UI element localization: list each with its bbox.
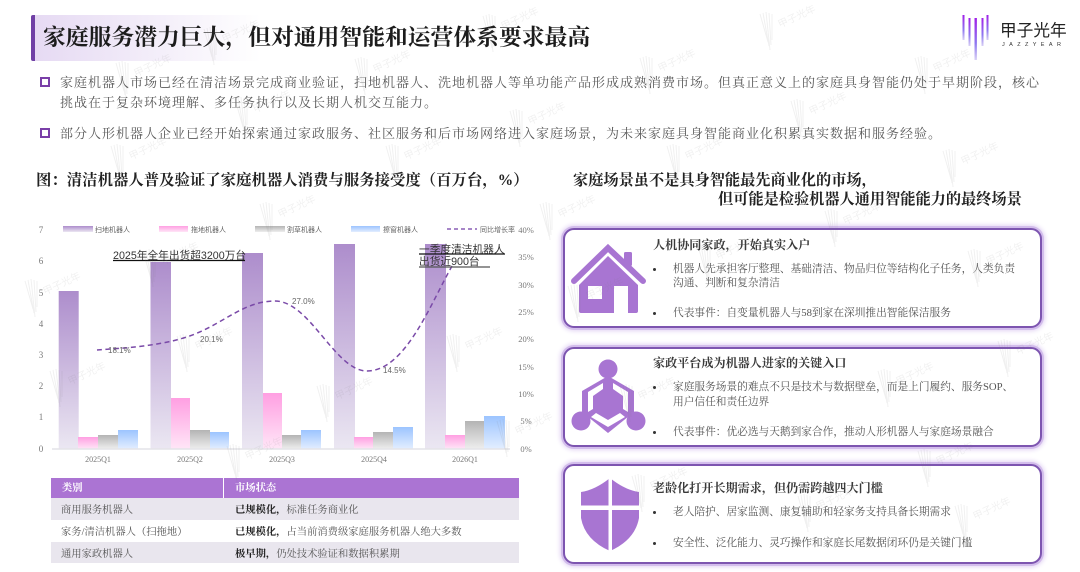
text: 甲子光年 bbox=[463, 324, 505, 353]
bars bbox=[59, 244, 505, 449]
card 2 bullet 2: 代表事件：优必选与天鹅到家合作，推动人形机器人与家庭场景融合 bbox=[673, 426, 994, 438]
text: 甲子光年 bbox=[513, 409, 555, 438]
legend: 扫地机器人 bbox=[95, 225, 130, 234]
x axis labels: 2025Q3 bbox=[269, 455, 295, 464]
right axis: 40% bbox=[518, 225, 534, 235]
logo: JAZZYEAR bbox=[1002, 42, 1065, 48]
growth rate labels: 20.1% bbox=[200, 335, 223, 344]
text: 甲子光年 bbox=[841, 199, 883, 228]
table header bbox=[51, 478, 519, 498]
intro bullet 1 bbox=[40, 75, 1040, 110]
intro bullet 2: 部分人形机器人企业已经开始探索通过家政服务、社区服务和后市场网络进入家庭场景，为未来家庭具身智能商业化积累真实数据和服务经验。 bbox=[60, 126, 942, 141]
card 2 title: 家政平台成为机器人进家的关键入口 bbox=[653, 356, 847, 370]
icon: network hexagon bbox=[572, 360, 646, 433]
text: 甲子光年 bbox=[132, 51, 174, 80]
card 3 title: 老龄化打开长期需求，但仍需跨越四大门槛 bbox=[653, 481, 883, 495]
text: 甲子光年 bbox=[276, 192, 318, 221]
table row: general home: 极早期，仍处技术验证和数据积累期 bbox=[235, 549, 400, 560]
intro bullet 1: 家庭机器人市场已经在清洁场景完成商业验证，扫地机器人、洗地机器人等单功能产品形成成熟消费市场。但真正意义上的家庭具身智能仍处于早期阶段，核心 bbox=[60, 75, 1040, 90]
growth rate line bbox=[97, 266, 452, 371]
text: 甲子光年 bbox=[127, 134, 169, 163]
card 2 bullet 1: 家庭服务场景的难点不只是技术与数据壁垒，而是上门履约、服务SOP、 bbox=[673, 381, 1013, 393]
card 3 bullet 1: 老人陪护、居家监测、康复辅助和轻家务支持具备长期需求 bbox=[673, 506, 951, 518]
left axis: 2 bbox=[39, 381, 43, 391]
text: 甲子光年 bbox=[371, 47, 413, 76]
intro bullet 1: 挑战在于复杂环境理解、多任务执行以及长期人机交互能力。 bbox=[60, 95, 438, 110]
right column heading: 家庭场景虽不是具身智能最先商业化的市场， bbox=[573, 172, 877, 189]
text: 甲子光年 bbox=[556, 192, 598, 221]
text: 甲子光年 bbox=[959, 139, 1001, 168]
title band bbox=[31, 15, 261, 61]
left axis: 6 bbox=[39, 256, 44, 266]
callout: Q1 shipments bbox=[419, 243, 505, 268]
text: 甲子光年 bbox=[934, 439, 976, 468]
right axis: 30% bbox=[518, 280, 534, 290]
table header: 市场状态 bbox=[235, 483, 276, 494]
table row: household cleaning: 已规模化，占当前消费级家庭服务机器人绝大多数 bbox=[235, 527, 462, 538]
callout: Q1 shipments: 出货近900台 bbox=[419, 255, 480, 268]
text: 甲子光年 bbox=[159, 239, 201, 268]
text: 甲子光年 bbox=[66, 359, 108, 388]
growth rate labels: 14.5% bbox=[383, 366, 406, 375]
icon: shield bbox=[581, 479, 639, 550]
title: 家庭服务潜力巨大，但对通用智能和运营体系要求最高 bbox=[43, 25, 590, 50]
text: 甲子光年 bbox=[714, 234, 756, 263]
right axis: 20% bbox=[518, 334, 534, 344]
text: 甲子光年 bbox=[648, 464, 690, 493]
right column heading: 但可能是检验机器人通用智能能力的最终场景 bbox=[718, 191, 1022, 208]
text: 甲子光年 bbox=[776, 2, 818, 31]
left axis: 3 bbox=[39, 350, 44, 360]
text: 甲子光年 bbox=[1014, 329, 1056, 358]
text: 甲子光年 bbox=[807, 89, 849, 118]
left axis: 5 bbox=[39, 288, 44, 298]
text: 甲子光年 bbox=[499, 4, 541, 33]
text: 甲子光年 bbox=[333, 374, 375, 403]
right axis: 10% bbox=[518, 389, 534, 399]
x axis labels: 2025Q2 bbox=[177, 455, 203, 464]
table header: 类别 bbox=[62, 483, 83, 494]
text: 甲子光年 bbox=[656, 46, 698, 75]
card 2 bullet 1: 用户信任和责任边界 bbox=[673, 396, 769, 408]
legend: 擦窗机器人 bbox=[383, 225, 418, 234]
icon: house bbox=[571, 244, 646, 313]
legend: 割草机器人 bbox=[287, 225, 322, 234]
text: 甲子光年 bbox=[683, 134, 725, 163]
text: 甲子光年 bbox=[220, 17, 262, 46]
table row: general home: 通用家政机器人 bbox=[61, 549, 133, 560]
text: 甲子光年 bbox=[984, 239, 1026, 268]
table row: general home bbox=[51, 542, 519, 563]
card 2 bullet 1 bbox=[653, 380, 1013, 408]
text: 甲子光年 bbox=[894, 359, 936, 388]
callout: full-year shipments: 2025年全年出货超3200万台 bbox=[113, 249, 246, 262]
logo: 甲子光年 bbox=[1000, 21, 1067, 40]
text: 甲子光年 bbox=[526, 99, 568, 128]
right axis: 25% bbox=[518, 307, 534, 317]
left axis: 1 bbox=[39, 412, 43, 422]
right axis: 15% bbox=[518, 362, 534, 372]
text: 甲子光年 bbox=[41, 269, 83, 298]
right axis: 35% bbox=[518, 252, 534, 262]
text: 甲子光年 bbox=[931, 46, 973, 75]
growth rate labels bbox=[108, 297, 406, 375]
x axis labels bbox=[85, 455, 478, 464]
table row: household cleaning bbox=[51, 520, 519, 542]
text: 甲子光年 bbox=[814, 484, 856, 513]
x axis labels: 2025Q4 bbox=[361, 455, 387, 464]
text: 甲子光年 bbox=[251, 87, 293, 116]
table row: household cleaning: 家务/清洁机器人（扫拖地） bbox=[61, 527, 187, 538]
card 1 bullet 1: 机器人先承担客厅整理、基础清洁、物品归位等结构化子任务，人类负责 bbox=[673, 263, 1015, 275]
table row: commercial bbox=[51, 498, 519, 520]
right axis bbox=[518, 225, 534, 454]
text: 甲子光年 bbox=[193, 324, 235, 353]
table row: commercial: 已规模化，标准任务商业化 bbox=[235, 505, 359, 516]
card 3 bullet 2: 安全性、泛化能力、灵巧操作和家庭长尾数据闭环仍是关键门槛 bbox=[673, 537, 972, 549]
text: 甲子光年 bbox=[584, 274, 626, 303]
right axis: 5% bbox=[520, 416, 532, 426]
callout: Q1 shipments: 一季度清洁机器人 bbox=[419, 243, 505, 256]
left axis: 4 bbox=[39, 319, 44, 329]
panel: ageing demand bbox=[563, 464, 1042, 564]
chart heading: 图：清洁机器人普及验证了家庭机器人消费与服务接受度（百万台，%） bbox=[36, 172, 529, 189]
left axis: 0 bbox=[39, 444, 44, 454]
left axis bbox=[39, 225, 44, 454]
growth rate labels: 27.0% bbox=[292, 297, 315, 306]
panel: human-robot home bbox=[563, 228, 1042, 328]
legend bbox=[63, 225, 515, 234]
x axis labels: 2025Q1 bbox=[85, 455, 111, 464]
logo bbox=[962, 15, 1067, 60]
text: 甲子光年 bbox=[971, 494, 1013, 523]
table row: commercial: 商用服务机器人 bbox=[61, 505, 133, 516]
card 1 bullet 2: 代表事件：自变量机器人与58到家在深圳推出智能保洁服务 bbox=[673, 307, 951, 319]
text: 甲子光年 bbox=[243, 434, 285, 463]
legend: 同比增长率 bbox=[480, 225, 515, 234]
card 1 bullet 1 bbox=[653, 262, 1015, 289]
right axis: 0% bbox=[520, 444, 532, 454]
growth rate labels: 18.1% bbox=[108, 346, 131, 355]
text: 甲子光年 bbox=[402, 134, 444, 163]
panel: home service platform bbox=[563, 347, 1042, 447]
legend: 拖地机器人 bbox=[191, 225, 226, 234]
status table bbox=[51, 478, 519, 563]
text: 甲子光年 bbox=[636, 374, 678, 403]
card 1 bullet 1: 沟通、判断和复杂清洁 bbox=[673, 277, 780, 289]
left axis: 7 bbox=[39, 225, 44, 235]
right column heading bbox=[573, 172, 1022, 208]
card 1 title: 人机协同家政，开始真实入户 bbox=[653, 238, 810, 252]
x axis labels: 2026Q1 bbox=[452, 455, 478, 464]
